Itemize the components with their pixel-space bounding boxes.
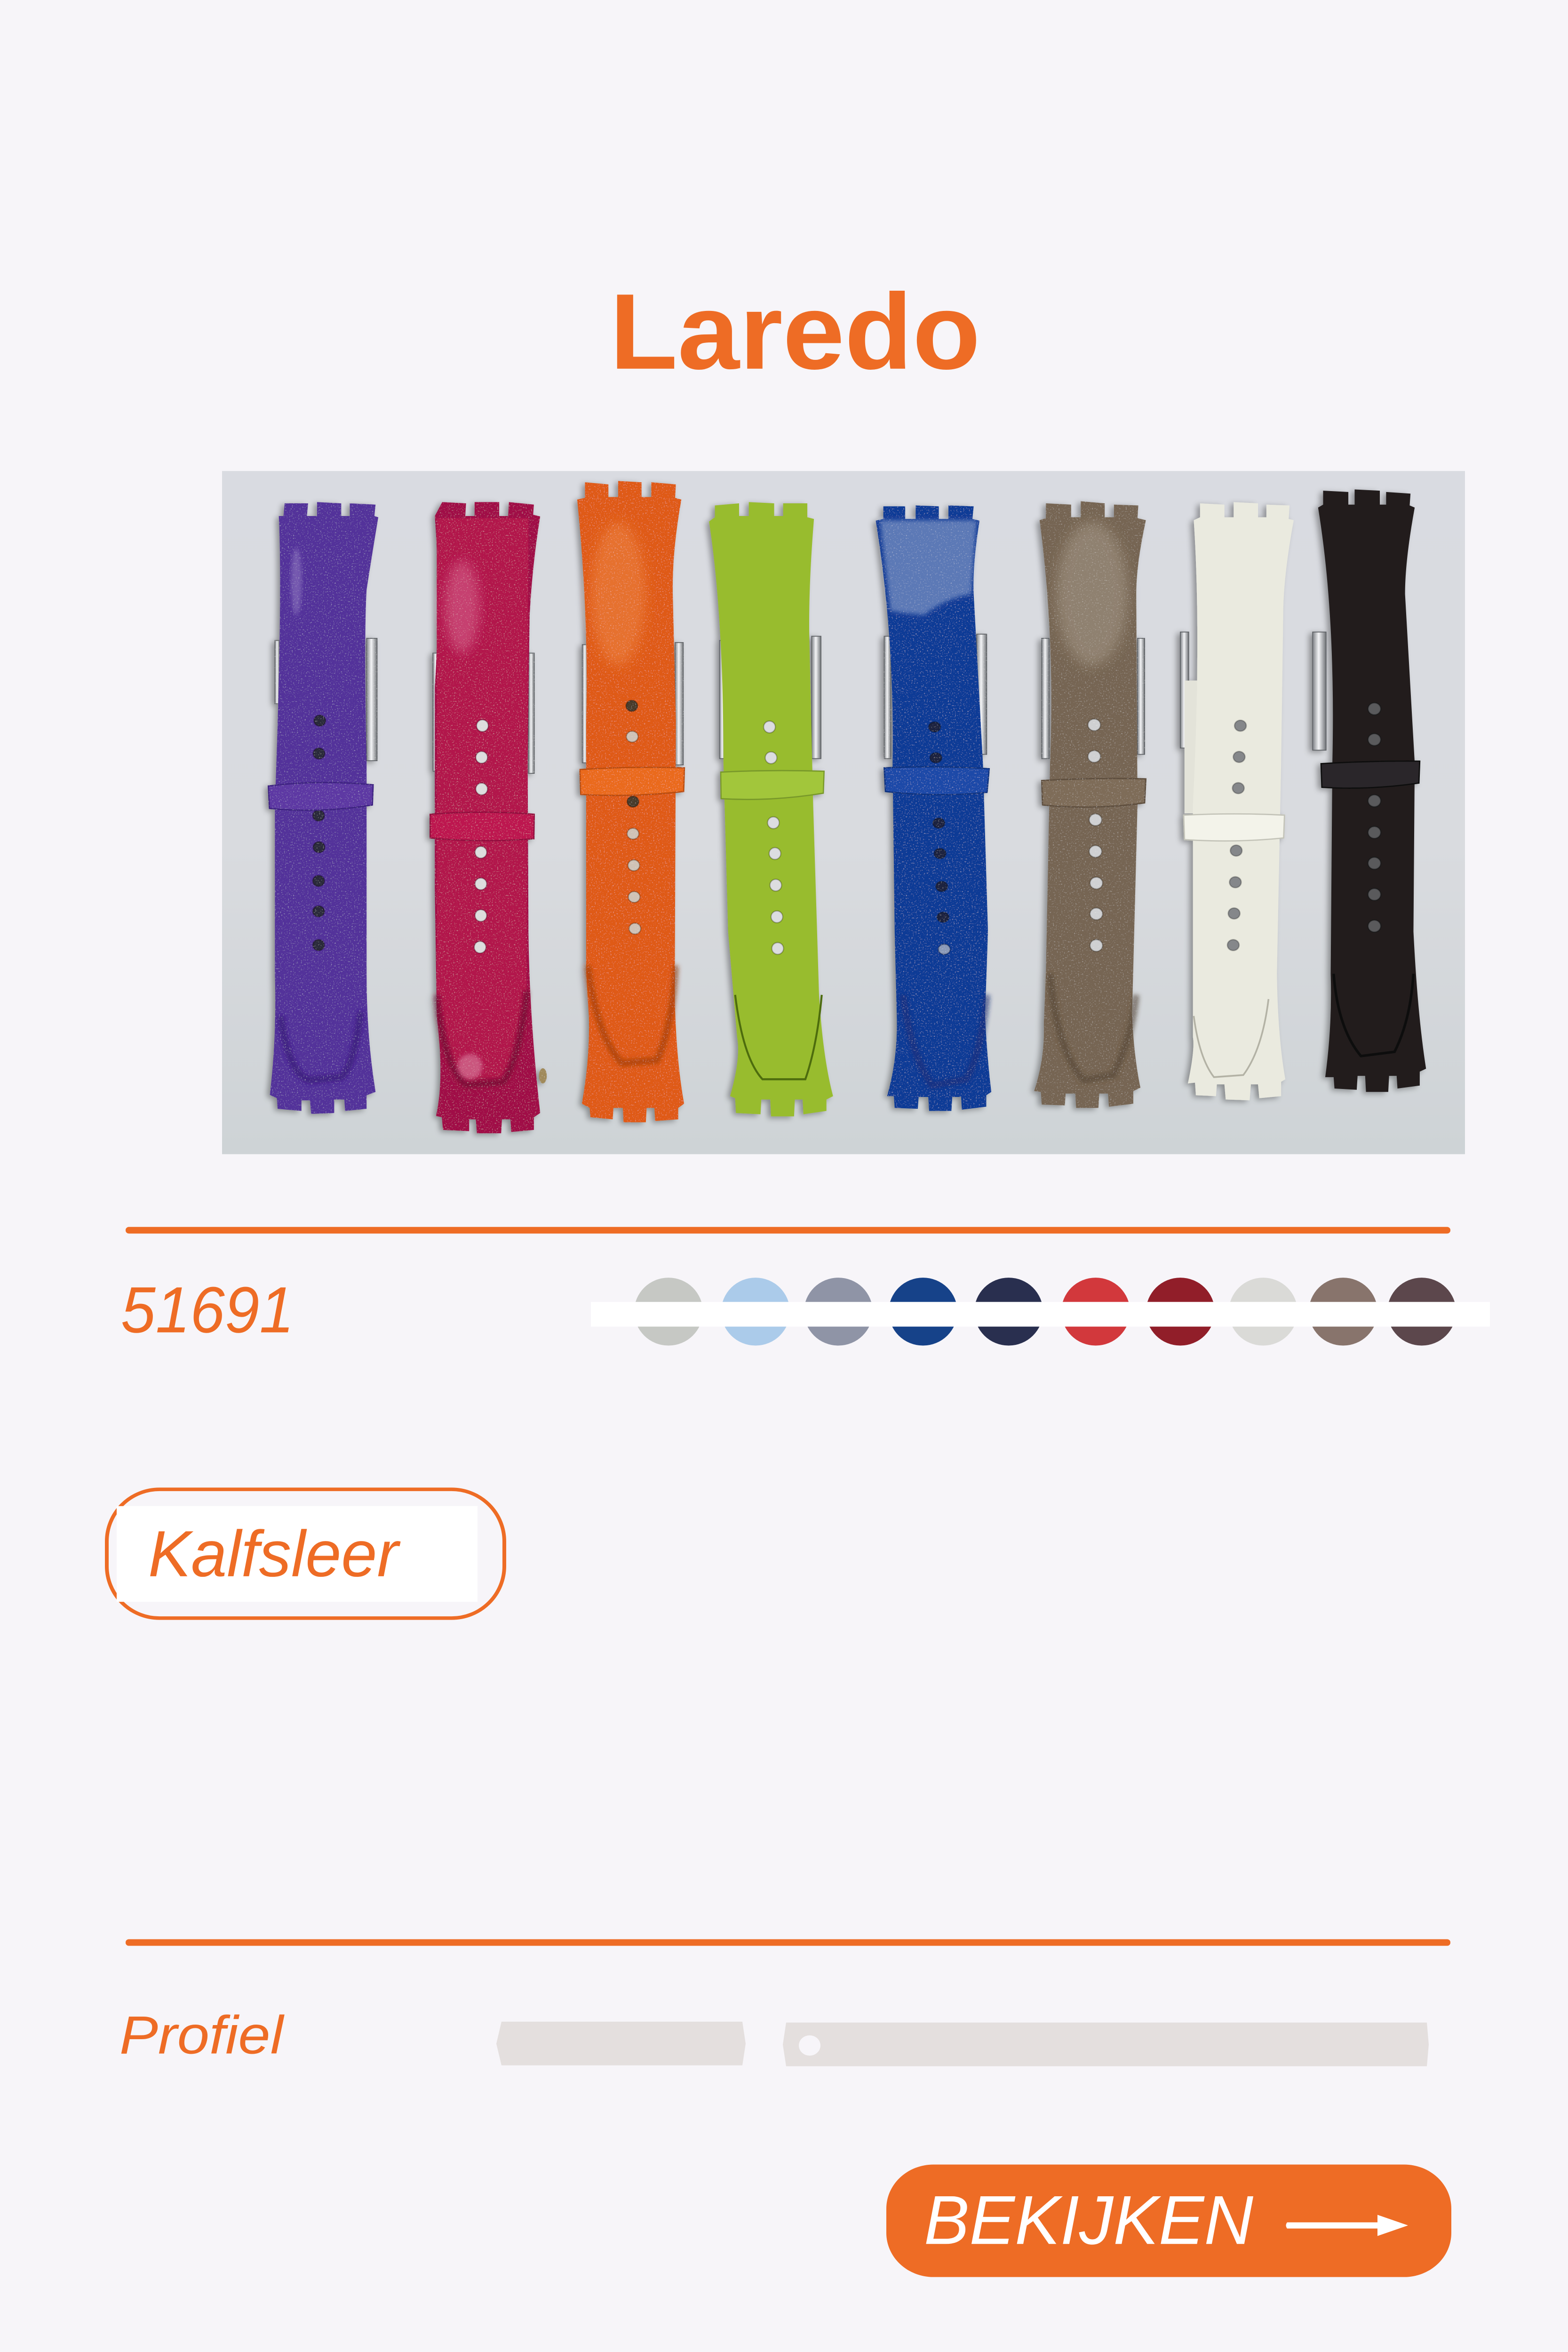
profile: short strap part: [496, 2022, 746, 2066]
profile: long strap part: [783, 2023, 1429, 2066]
straps left group: [268, 481, 833, 1133]
straps right group: [876, 489, 1426, 1111]
strap: green: [709, 502, 833, 1116]
product photo: eight coloured watch straps: [222, 471, 1465, 1154]
strap: orange: [577, 481, 685, 1122]
strap: blue: [876, 506, 991, 1111]
strap: black: [1313, 489, 1426, 1092]
colour swatches: [591, 1278, 1490, 1345]
strap: purple: [268, 502, 378, 1114]
button: Bekijken: BEKIJKEN: [924, 2182, 1253, 2259]
article number: 51691: [121, 1274, 294, 1346]
strap: white: [1180, 502, 1294, 1100]
strap: crimson: [430, 502, 547, 1133]
arrow icon: [1286, 2215, 1408, 2236]
strap: brown: [1034, 501, 1146, 1108]
material tag: Kalfsleer: Kalfsleer: [148, 1518, 401, 1590]
button: Bekijken: [886, 2165, 1451, 2277]
profile label: Profiel: [119, 2005, 285, 2065]
material tag: Kalfsleer: [107, 1489, 504, 1618]
title: Laredo: [610, 272, 980, 392]
